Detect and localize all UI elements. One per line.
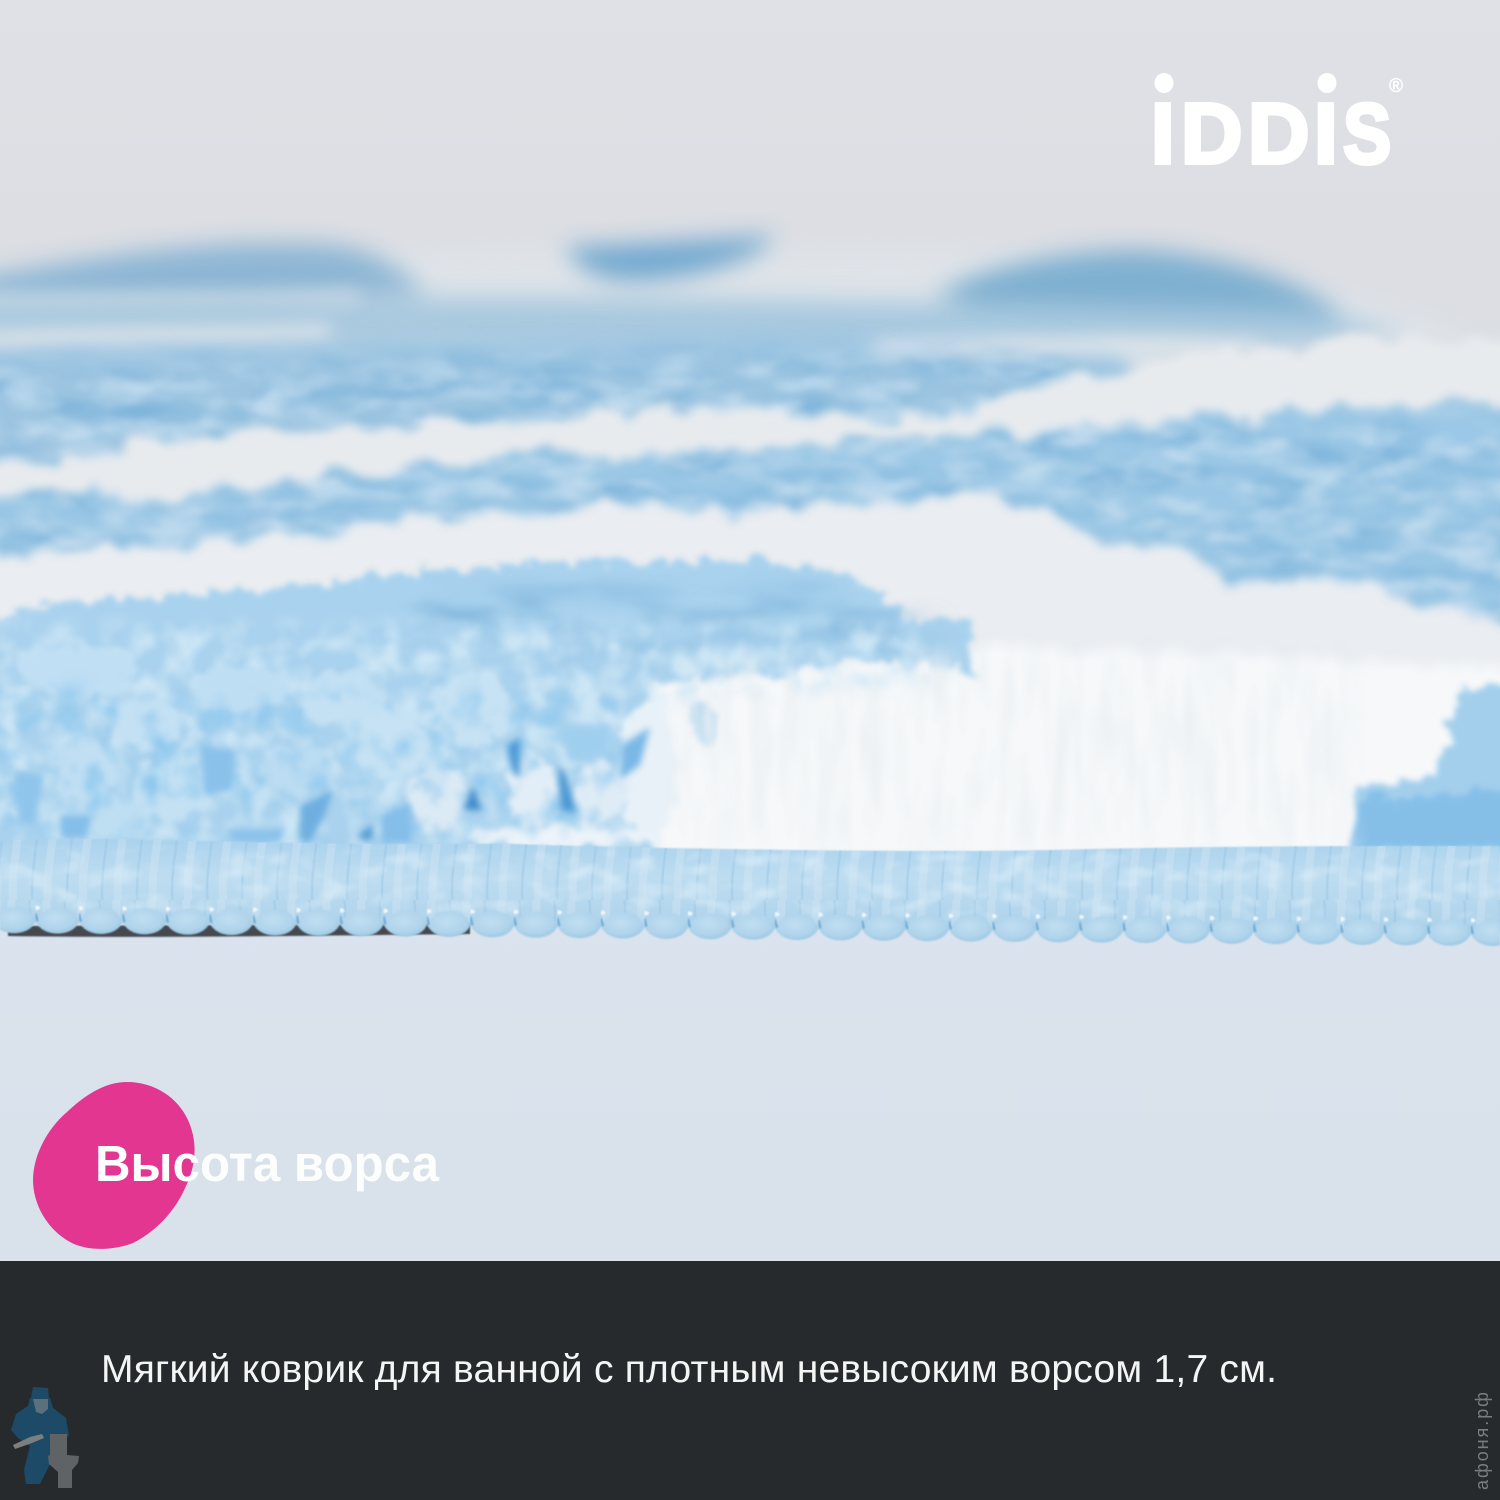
- body text: Мягкий коврик для ванной с плотным невысоким ворсом 1,7 см.: [101, 1348, 1277, 1391]
- logo letter s: S: [1343, 86, 1391, 181]
- icon: plumber with toilet: [11, 1387, 79, 1488]
- registered mark: ®: [1389, 76, 1403, 97]
- plumber face: [33, 1399, 48, 1414]
- shadow under cord: [8, 924, 470, 937]
- far pale mottling: [0, 350, 1500, 640]
- near pile shadow texture: [0, 690, 620, 835]
- near white stripe: [0, 497, 1500, 860]
- heading: Высота ворса: [95, 1135, 440, 1192]
- near white highlight: [640, 645, 1500, 860]
- far rug area, out of focus: [0, 236, 1500, 700]
- pink blob: [33, 1082, 195, 1249]
- photo: rug: [0, 236, 1500, 950]
- far blue mottling: [0, 350, 1500, 640]
- white pile streaks: [680, 660, 1350, 840]
- plumber figure: [11, 1387, 69, 1484]
- near pile top mottling: [420, 590, 960, 660]
- logo: iddis: [1151, 73, 1403, 182]
- logo dot one: [1154, 73, 1174, 93]
- dark footer panel: [0, 1261, 1500, 1500]
- watermark: афоня.рф: [1472, 1392, 1492, 1490]
- pile tufts: [20, 646, 719, 848]
- far pale stripes: [0, 292, 1260, 460]
- near blue pile: [0, 560, 1500, 870]
- middle blue field: [0, 395, 1500, 700]
- logo wordmark: IDDI: [1151, 87, 1338, 182]
- wrench: [13, 1434, 44, 1449]
- white stripe: [0, 337, 1500, 496]
- stitched border band: [0, 839, 1500, 934]
- near pile pale texture: [0, 625, 960, 850]
- bottom cord: [0, 900, 1500, 950]
- toilet: [48, 1434, 79, 1488]
- dark crevices between tufts: [14, 725, 650, 843]
- logo dot two: [1318, 73, 1336, 93]
